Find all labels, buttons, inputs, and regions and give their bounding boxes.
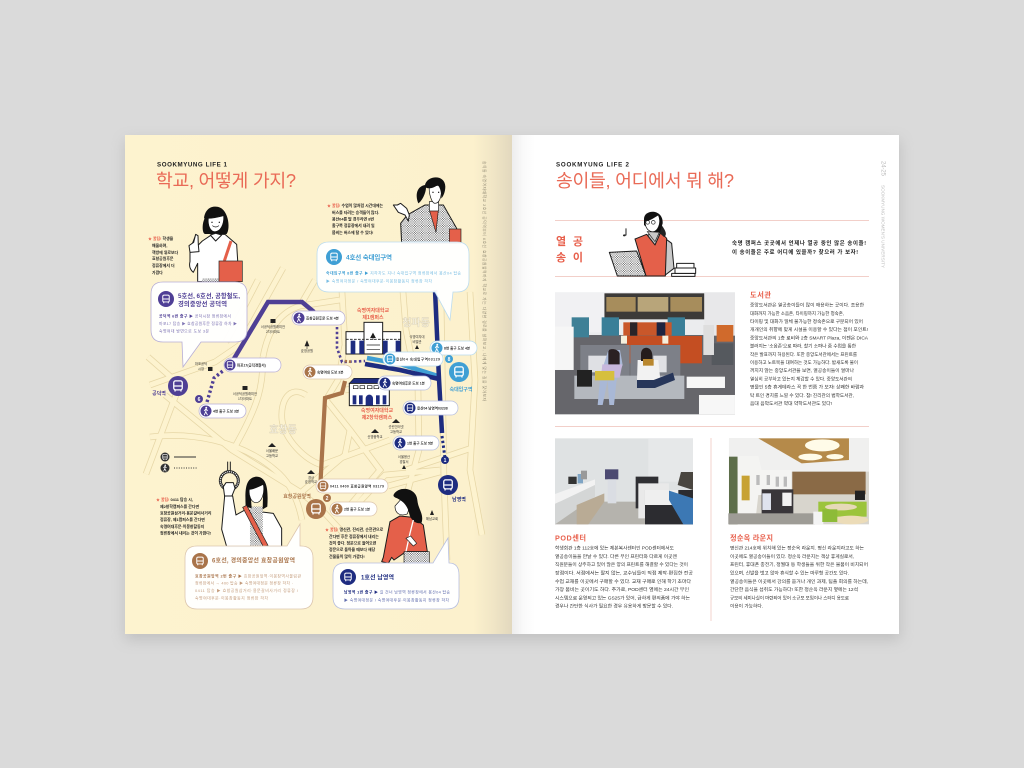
campus label 2: 숙명여자대학교 [361,407,393,414]
text: library: 타이핑 및 대화가 일체 불가능한 정숙존으로 구분되어 있어 [750,318,863,325]
text: lounge: 프린터, 휴대폰 충전기, 정월대 등 학생들을 위한 작은 물품이 비치되어 [730,561,868,568]
text: library: 음대 음악도서관 약대 약학도서관도 있다! [750,400,832,407]
intro text: 숙명 캠퍼스 곳곳에서 언제나 열공 중인 많은 송이들! [732,239,866,247]
callout: line 6 Hyochang: 효창공원앞역 2번 출구 ▶ 효창공원앞역·이봉창역사울림관 [195,574,301,578]
text: library: 탁 트인 경치를 느낄 수 있다. 참! 진리관의 법학도서관, [750,392,854,399]
station: 숙대입구역: 숙대입구역 [449,386,473,393]
text: lounge [730,545,868,610]
note: tip 3 [156,497,212,536]
title: left kicker: SOOKMYUNG LIFE 1 [157,162,228,168]
text: library: 중앙도서관의 1층 로비와 2층 SMART Plaza, 이젠은 DICA [750,334,869,341]
section label [556,234,583,264]
pill: walk 2번 출구 [330,502,377,516]
district label: 효창동: 효창동 [269,423,297,436]
text: library: 개개인의 취향에 맞게 시설을 이용할 수 있다는 점이 포인트! [750,326,868,333]
note: tip 3: ★ 꿀팁! 0411 탑승 시, [156,497,193,502]
map landmark labels: 선린인터넷 [388,424,404,429]
person: student with laptop [609,212,696,276]
callout: line 4 Sookdae: ▶ 숙명여자정문 / 숙명여대후문·이봉창활동지 정류장 하차 [326,278,432,284]
text: lounge: 간단한 음식을 섭취도 가능하다! 또한 정순옥 라운지 옆에는 12석 [730,586,858,593]
map landmark labels: 마포공덕 [195,361,207,366]
note: tip 4: 간다면 후문 정류장에서 내리는 [329,534,379,539]
note: tip 2: 출구쪽 정류장에서 내려 일 [332,223,375,228]
route: line 1 navy [365,290,445,458]
note: tip 3: 정류장, 제1캠퍼스를 간다면 [160,517,205,522]
pill: bus 용산04 남영역: 용산04 남영역03238 [417,406,448,410]
text: POD center: 수업 교재를 이곳에서 구매할 수 있다. 교재 구매로 인해 학기 초마다 [555,578,692,585]
pill: walk 숙명여대후문: 숙명여대후문 도보 1분 [392,380,426,386]
pill: bus 용산04 숙대입구 [383,352,443,366]
callout: line 6 Hyochang: 정류장에서 → 400 탑승 ▶ 숙명여대정문 정류장 하차 · [195,580,293,586]
note: tip 4: 건물들이 많이 가깝다! [329,554,365,559]
map landmark labels: 해남교회 [426,516,438,521]
map landmark labels: 경찰서 [399,459,409,464]
map landmark labels: 고등학교 [266,453,278,458]
callout: line 1 Namyeong: 남영역 1번 출구 ▶ 길 건너 남영역 정류장에서 용산04 탑승 [344,590,450,594]
text: POD center: 장점이다. 서점에서는 팔지 않는, 교수님들이 직접 제작·편집한 전공 [555,570,694,576]
page number: 24-25 [880,161,886,177]
note: tip 1: 효창공원후문 [152,256,174,261]
station: 공덕역: 공덕역 [152,390,166,397]
route: line 4 blue [367,358,438,376]
station: 공덕역 [152,376,188,397]
callout: line 1 Namyeong: 1호선 남영역 [361,574,394,582]
text: POD center: 경우나 간단한 식사가 필요한 경우 유용하게 방문할 수 있다. [555,603,673,610]
person: student waving [393,177,461,243]
intro text [732,239,866,256]
text: lounge: 규모의 세미나실이 마련되어 있어 소규모 모임이나 스터디 용도로 [730,594,850,601]
line number badges: 2 [326,496,329,502]
callout: line 5/6 Gongdeok: 경의중앙선 공덕역 [178,299,227,308]
note: tip 2: 붐비는 버스에 탈 수 있다! [332,230,373,235]
text: lounge: 열공송이들은 이곳에서 강의를 듣거나 개인 과제, 팀플 회의를 하는데, [730,578,868,585]
map landmark labels: 효창학교 [305,479,317,484]
map landmark labels: 경상 [308,475,314,480]
pill: walk 8번 출구 [430,341,477,355]
note: tip 1 [148,236,179,275]
line number badges [195,355,453,502]
map roads [146,268,482,560]
callout: line 6 Hyochang: 0411 탑승 ▶ 효창공원삼거리·용문갈비사거리 정류장 / [195,588,299,593]
line number badges: 8 [448,357,451,363]
note: tip 1: 가깝다 [152,270,163,275]
note: tip 2: 용산04를 탈 경우라면 8번 [332,216,374,222]
callout: line 5/6 Gongdeok: 공덕역 6번 출구 ▶ 공덕시장 정류장에서 [159,314,231,318]
pill: walk 1번 출구: 1번 출구 도보 5분 [407,440,434,446]
text: lounge: 이용이 가능하다. [730,603,763,610]
text: POD center: 열공송이들을 만날 수 있다. 다른 무인 프린터와 다르게 이곳엔 [555,553,677,560]
map landmark labels: 고등학교 [390,429,402,434]
vertical spine text: 송이들 숙명여자대학교 2호선 공덕역부터 6호선 효창공원앞역까지 학교로 가는 다양한 경로를 살펴보고, 나에게 맞는 길을 찾아보자 [482,161,487,402]
callout: line 1 Namyeong: ▶ 숙명여대정문 / 숙명여대후문·이봉창활동지 정류장 하차 [344,598,449,602]
district label: 청파동: 청파동 [402,316,430,329]
pill: walk 효창공원: 효창공원후문 도보 4분 [306,316,340,320]
callout: line 6 Hyochang [185,524,313,609]
text: library: 불러지는 '소음존'으로 따라, 찰기 소파나 줌 수업을 통한 [750,343,857,350]
building: campus 2 [349,378,389,406]
pill: walk 4번 출구: 4번 출구 도보 3분 [213,408,240,414]
note: tip 1: 정류장에서 더 [152,263,175,268]
pill: walk 숙명여대 brown [303,365,352,379]
text: library [750,302,869,407]
note: tip 3: 정류장에서 내리는 것이 가깝다! [160,530,211,536]
text: POD center: 직원분들이 상주하고 있어 많은 양의 프린트를 해결할 수 있다는 것이 [555,561,688,568]
map landmark labels [195,319,438,521]
line number badges: 1 [444,458,447,464]
text: POD center: 가장 붐비는 곳이기도 하다. 추가로, POD센터 옆에는 24시간 무인 [555,586,689,593]
station: 효창공원앞역 [283,493,326,519]
photo: lounge [728,438,869,524]
section band lines [555,220,869,621]
station: 남영역: 남영역 [452,496,466,503]
photo: POD center [555,438,693,524]
map landmark labels: 신명중학교 [367,434,383,439]
map landmark labels: 1차아파트 [238,396,252,401]
note: tip 2: ★ 꿀팁! 수업이 많처럼 시간대에는 [327,203,383,208]
book shadow [125,140,900,640]
pill: bus 0411 [316,479,388,493]
text: lounge: 있으며, 신발을 벗고 앉아 휴식할 수 있는 마루형 공간도 있다. [730,570,849,576]
callout: line 5/6 Gongdeok: 5호선, 6호선, 공항철도, [178,291,240,300]
note: tip 3: 효창공원삼거리·용문갈비사거리 [160,510,212,516]
map landmark labels: 서공덕공원래미안 [233,391,257,396]
campus label 1: 제1캠퍼스 [362,314,384,321]
map landmark labels: 시장 [198,366,204,371]
text: POD center [555,545,694,610]
pill: walk 1번 출구 [393,436,439,450]
text: lounge: 명신관 214호에 위치해 있는 정순옥 라운지. 명신 라운지라고도 하는 [730,545,865,552]
map landmark labels: 비엘관 [412,339,422,344]
pill: bus 용산04 숙대입구: 용산04 숙대입구역03129 [396,356,440,362]
university name: SOOKMYUNG WOMEN'S UNIVERSITY [880,185,886,268]
person: student on subway [220,462,282,547]
pill: walk 4번 출구 [199,404,246,418]
callout: line 6 Hyochang: 숙명여대후문·이봉창활동지 정류장 하차 [195,596,268,600]
route: line 6 walking dots [345,361,352,362]
callout: line 5/6 Gongdeok: 숙명여대 방면으로 도보 3분 [159,328,209,334]
note: tip 2 [327,203,383,235]
callout: line 1 Namyeong [333,538,459,609]
note: tip 1: ★ 꿀팁! 학생을 [148,236,174,241]
text: library: 이용하고 노트북을 대여하는 것도 가능하다. 밤새도록 불이 [750,359,858,366]
pill: bus 마포17: 마포17(공덕경찰서) [237,362,266,368]
pill: walk 숙명여대 brown: 숙명여대 도보 3분 [317,370,344,374]
building: campus 1 [346,322,401,354]
note: tip 3: 제2창학캠퍼스를 간다면 [160,504,199,509]
heading: library: 도서관 [750,290,771,300]
heading: POD center: POD센터 [555,534,586,542]
pill: walk 효창공원 [292,311,345,325]
campus label 2 [361,407,393,421]
heading: lounge: 정순옥 라운지 [730,534,773,542]
text: library: 작은 발표까지 허용된다. 또한 중앙도서관에서는 프린트를 [750,351,858,358]
person: student with handbag [382,489,429,564]
note: tip 4: ★ 꿀팁! 명신관, 진리관, 순헌관으로 [325,527,384,532]
callout: line 5/6 Gongdeok: 마포17 탑승 ▶ 효창공원후문 정류장 하차 ▶ [159,321,237,326]
station: 효창공원앞역: 효창공원앞역 [283,493,311,500]
pill: walk 8번 출구: 8번 출구 도보 4분 [444,346,471,350]
text: library: 열심히 공부하고 있는지 체감할 수 있다. 중앙도서관의 [750,375,852,382]
text: library: 중앙도서관은 열공송이들이 많이 애용하는 곳이다. 조용한 [750,302,865,309]
title: right heading: 송이들, 어디에서 뭐 해? [556,170,734,191]
note: tip 4: 것이 좋다. 정문으로 들어오면 [329,540,377,546]
map landmark labels: 서울용산 [398,454,410,459]
pill: walk 숙명여대후문 [378,376,431,390]
station: 숙대입구역 [449,362,473,393]
section label: 송 이 [556,251,583,264]
map landmark labels: 효창공원 [301,348,313,353]
map landmark labels: 서공덕공원래미안 [261,324,285,329]
callout: line 4 Sookdae: 숙대입구역 8번 출구 ▶ 지하차도 지나 숙대입구역 정류장에서 용산04 탑승 [326,270,461,276]
route: line 5 purple [207,302,365,402]
route: line 6 brown [320,381,345,492]
line number badges: 6 [198,397,201,403]
title: right kicker: SOOKMYUNG LIFE 2 [556,162,630,168]
note: tip 4 [325,527,384,559]
note: tip 2: 버스를 타려는 승객들이 많다. [332,210,379,215]
panel: right page [512,135,899,634]
callout: line 4 Sookdae [317,242,469,320]
station: 남영역 [438,475,466,503]
photo: library [555,292,735,414]
note: tip 1: 배울하여, [152,243,167,248]
map landmark labels: 서울배문 [266,448,278,453]
campus label 1: 숙명여자대학교 [357,307,389,314]
legend [160,452,197,472]
pill: bus 용산04 남영역 [403,401,458,415]
campus label 1 [357,307,389,321]
campus label 2: 제2창학캠퍼스 [362,414,393,421]
callout: line 5/6 Gongdeok [151,282,247,367]
pill: walk 2번 출구: 2번 출구 도보 1분 [344,506,371,512]
text: library: 명물인 5층 휴게테라스 꼭 한 번쯤 가 보자! 상쾌한 바람과 [750,384,865,391]
text: library: 꺼지지 않는 중앙도서관을 보면, 열공송이들이 얼마나 [750,367,855,374]
text: POD center: 시스템으로 운영되고 있는 GS25가 있어, 급하게 편의품에 가야 하는 [555,594,691,601]
note: tip 4: 정문으로 돌아올 때보다 해당 [329,547,376,552]
pill: bus 마포17 [224,358,281,372]
title: left heading: 학교, 어떻게 가지? [156,170,296,191]
callout: line 4 Sookdae: 4호선 숙대입구역 [346,252,392,262]
text: library: 대화까지 가능한 소음존, 타이핑까지 가능한 청숙존, [750,310,844,317]
person: student with bag [189,207,242,282]
text: lounge: 이곳에도 열공송이들이 있다. 정순옥 라운지는 책상 휴게실로서, [730,553,854,560]
panel: left page [125,135,512,634]
intro text: 이 송이들은 주로 어디에 있을까? 찾으러 가 보자! [732,248,858,256]
pill: bus 0411: 0411 0400 효창공원앞역 03179 [330,484,384,488]
note: tip 1: 책방에 위로보다 [152,250,179,255]
map landmark labels: 2차아파트 [266,329,280,334]
note: tip 3: 숙명여대후문·이봉창활동지 [160,524,205,529]
text: POD center: 학생회관 1층 112호에 있는 제본복사센터인 POD센터에서도 [555,545,675,552]
callout: line 6 Hyochang: 6호선, 경의중앙선 효창공원앞역 [212,556,295,564]
section label: 열 공 [556,234,583,248]
map landmark labels: 식명여자대 [409,334,425,339]
